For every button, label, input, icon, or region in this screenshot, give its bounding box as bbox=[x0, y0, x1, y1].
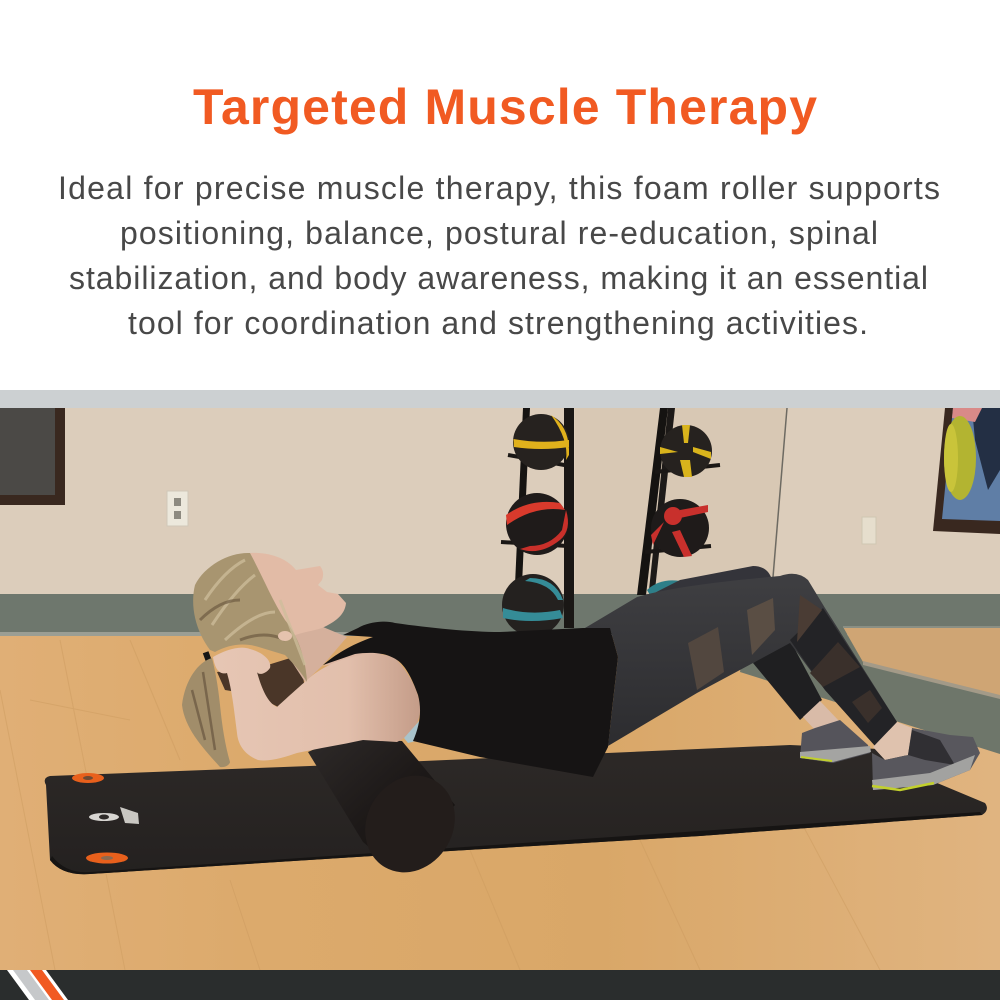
head shadow behind arm bbox=[217, 655, 305, 708]
far ankle bbox=[803, 701, 840, 730]
ponytail bbox=[182, 658, 230, 767]
black tank top bbox=[323, 622, 618, 777]
reflected red ball bbox=[651, 499, 709, 557]
reflected rack bbox=[637, 408, 720, 595]
reflected yellow ball bbox=[660, 425, 712, 477]
yoga mat bbox=[45, 745, 987, 874]
mat grommet bottom bbox=[86, 852, 128, 864]
description text block: positioning, balance, postural re-education, spinal bbox=[120, 215, 878, 251]
gray divider band bbox=[0, 390, 1000, 408]
mesh panel 5 bbox=[852, 690, 882, 723]
mat logo bbox=[89, 807, 139, 824]
mesh panel 3 bbox=[797, 595, 822, 642]
medicine ball rack bbox=[501, 408, 574, 628]
description text block: stabilization, and body awareness, making it an essential bbox=[69, 260, 928, 296]
description text block: Ideal for precise muscle therapy, this foam roller supports bbox=[58, 170, 940, 206]
description text block: tool for coordination and strengthening activities. bbox=[128, 305, 868, 341]
baseboard bbox=[0, 594, 1000, 636]
near leg with mesh panels bbox=[585, 574, 897, 747]
mirror floor reflection bbox=[843, 627, 1000, 697]
description text block bbox=[58, 170, 940, 341]
foam roller bbox=[308, 740, 455, 872]
chest skin by strap bbox=[323, 637, 395, 666]
hair bbox=[182, 553, 307, 767]
mesh panel 4 bbox=[810, 642, 860, 687]
title: Targeted Muscle Therapy bbox=[193, 79, 817, 135]
neck bbox=[292, 627, 347, 682]
hair tie bbox=[203, 651, 212, 662]
red medicine ball bbox=[506, 493, 568, 555]
photo: woman on foam roller bbox=[0, 408, 1000, 970]
bottom bar bbox=[0, 970, 1000, 1000]
ear bbox=[278, 631, 292, 641]
lower leg band bbox=[790, 608, 897, 747]
face bbox=[250, 553, 346, 640]
right window with reflection bbox=[933, 408, 1000, 534]
reflected teal ball bbox=[647, 580, 680, 595]
far shoe bbox=[800, 720, 871, 763]
brand stripes bbox=[7, 970, 68, 1000]
wall outlet left bbox=[167, 491, 188, 526]
mirror edge bbox=[773, 408, 787, 577]
near shoe bbox=[872, 728, 980, 790]
far leg lower bbox=[753, 640, 822, 720]
left window bbox=[0, 408, 65, 505]
near ankle bbox=[873, 722, 912, 760]
arm and shoulder bbox=[213, 648, 420, 760]
wall outlet right bbox=[862, 517, 876, 544]
mesh panel 2 bbox=[747, 598, 775, 655]
wall bbox=[0, 408, 1000, 600]
mirrored wall section bbox=[575, 408, 787, 600]
yellow medicine ball bbox=[513, 414, 569, 470]
mirror ledge bbox=[740, 626, 1000, 754]
far leg thigh bbox=[585, 566, 771, 630]
sports bra sliver bbox=[404, 720, 420, 743]
mat grommet top bbox=[72, 773, 104, 783]
wood floor bbox=[0, 636, 1000, 970]
mesh panel 1 bbox=[688, 627, 724, 690]
teal medicine ball bbox=[502, 574, 564, 636]
